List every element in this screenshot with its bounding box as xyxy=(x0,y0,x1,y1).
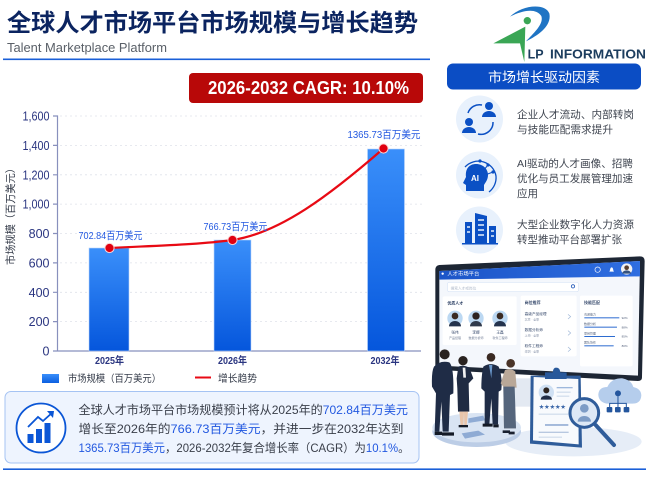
monitor screen xyxy=(435,256,645,381)
data labels xyxy=(78,128,421,242)
bar chart: market size and growth trend xyxy=(4,110,425,367)
monitor screen: 人才市场平台 xyxy=(447,270,479,278)
y axis labels xyxy=(22,110,50,358)
driver 2 text: AI驱动的人才画像、招聘 xyxy=(517,157,634,170)
monitor screen: 搜索人才或岗位 xyxy=(451,285,477,290)
illustration: talent marketplace platform dashboard and team xyxy=(432,256,645,456)
skills match card: 92% xyxy=(622,316,628,320)
driver 1 text: 企业人才流动、内部转岗 xyxy=(517,108,634,121)
axes xyxy=(53,116,421,351)
recommended talent card: 产品经理 xyxy=(449,335,461,340)
y axis title: 市场规模（百万美元） xyxy=(4,163,17,265)
recommended jobs card: 岗位推荐 xyxy=(525,299,541,305)
driver 2: AI xyxy=(456,152,634,200)
y axis labels: 800 xyxy=(29,227,50,241)
driver 2 text xyxy=(517,157,634,200)
bar: 2026 xyxy=(214,240,251,351)
y axis labels: 200 xyxy=(29,315,50,329)
summary text xyxy=(78,402,410,455)
business people group xyxy=(432,349,517,436)
icon: office buildings xyxy=(456,206,503,254)
icon: AI head xyxy=(456,152,503,198)
recommended jobs card: 数据分析师 xyxy=(525,327,543,332)
driver 1 text xyxy=(517,108,634,136)
y axis labels: 0 xyxy=(43,344,50,358)
y axis labels: 1,400 xyxy=(22,139,50,153)
logo: LP Information: LP xyxy=(528,47,544,61)
summary text: 全球人才市场平台市场规模预计将从2025年的702.84百万美元 xyxy=(78,402,408,417)
person 3 xyxy=(481,353,502,427)
monitor stand xyxy=(513,378,537,407)
x axis labels: 2026年 xyxy=(218,354,247,367)
summary text: 增长至2026年的 766.73百万美元 ，并进一步在2032年达到 xyxy=(78,421,404,436)
panel: market growth drivers xyxy=(447,64,641,254)
x axis labels xyxy=(95,354,400,367)
recommended talent card: 优质人才 xyxy=(447,299,463,305)
recommended jobs card: 深圳 · 全职 xyxy=(525,348,539,353)
panel heading: 市场增长驱动因素 xyxy=(488,69,600,85)
recommended talent card: 张伟 xyxy=(451,330,459,335)
y axis labels: 400 xyxy=(29,286,50,300)
y axis labels: 1,200 xyxy=(22,168,50,182)
data labels: 702.84百万美元 xyxy=(78,229,143,242)
person 4 xyxy=(501,359,517,434)
recommended talent card: 软件工程师 xyxy=(493,335,507,340)
person 2 xyxy=(457,356,473,427)
driver 1 text: 与技能匹配需求提升 xyxy=(517,123,613,136)
logo: LP Information xyxy=(493,6,646,62)
y axis labels: 1,000 xyxy=(22,198,50,212)
person 1 xyxy=(432,349,454,436)
icon: AI head: AI xyxy=(471,174,479,183)
driver 3 text: 转型推动平台部署扩张 xyxy=(517,233,622,246)
title: 全球人才市场平台市场规模与增长趋势 xyxy=(7,9,418,37)
recommended jobs card: 软件工程师 xyxy=(525,343,543,348)
driver 1: talent mobility xyxy=(456,96,634,142)
resume clipboard: ★★★★★ xyxy=(539,404,566,410)
magnifying glass xyxy=(570,399,614,445)
CAGR badge: 2026-2032 CAGR: 10.10% xyxy=(208,78,409,98)
skills match card: 数据分析 xyxy=(584,321,596,326)
data labels: 766.73百万美元 xyxy=(204,220,268,233)
skills match card xyxy=(580,296,633,366)
skills match card: 团队协作 xyxy=(584,340,596,345)
icon: growth chart xyxy=(16,404,66,452)
subtitle: Talent Marketplace Platform xyxy=(7,41,167,55)
summary text: 1365.73百万美元，2026-2032年复合增长率（CAGR）为10.1%。 xyxy=(78,440,410,455)
y axis labels: 600 xyxy=(29,256,50,270)
resume clipboard xyxy=(530,368,582,448)
skills match card: 技能匹配 xyxy=(584,299,600,305)
recommended talent card xyxy=(443,296,517,345)
recommended talent card: 李娜 xyxy=(472,330,480,335)
x axis labels: 2025年 xyxy=(95,354,124,367)
y axis labels: 1,600 xyxy=(22,110,50,124)
cloud network xyxy=(598,378,641,412)
driver 3: enterprise digital transformation xyxy=(456,206,635,254)
chart legend: 增长趋势 xyxy=(218,372,257,385)
x axis labels: 2032年 xyxy=(370,354,400,367)
skills match card: 80% xyxy=(622,344,628,348)
logo: LP Information: INFORMATION xyxy=(550,47,646,61)
panel heading xyxy=(447,64,641,90)
chart legend: 市场规模（百万美元） xyxy=(68,372,161,385)
driver 3 text: 大型企业数字化人力资源 xyxy=(517,218,635,231)
recommended jobs card: 北京 · 全职 xyxy=(525,316,539,321)
summary callout xyxy=(5,392,419,463)
data labels: 1365.73百万美元 xyxy=(348,128,421,141)
ground platforms xyxy=(505,427,642,456)
icon: people exchange xyxy=(456,96,503,142)
recommended jobs card xyxy=(521,296,577,356)
growth trend line xyxy=(105,144,388,253)
skills match card: 项目管理 xyxy=(584,330,596,335)
chart legend xyxy=(42,372,257,385)
skills match card: 沟通能力 xyxy=(584,312,596,317)
skills match card: 85% xyxy=(622,335,628,339)
bar: 2032 xyxy=(368,149,404,351)
recommended jobs card: 高级产品经理 xyxy=(525,311,547,316)
driver 3 text xyxy=(517,218,635,246)
CAGR badge xyxy=(189,73,423,103)
skills match card: 88% xyxy=(622,325,628,329)
recommended talent card: 王磊 xyxy=(496,330,504,335)
driver 2 text: 优化与员工发展管理加速 xyxy=(517,172,634,185)
recommended jobs card: 上海 · 全职 xyxy=(525,332,539,337)
driver 2 text: 应用 xyxy=(517,187,538,200)
recommended talent card: 数据分析师 xyxy=(469,335,483,340)
bar: 2025 xyxy=(89,248,129,351)
